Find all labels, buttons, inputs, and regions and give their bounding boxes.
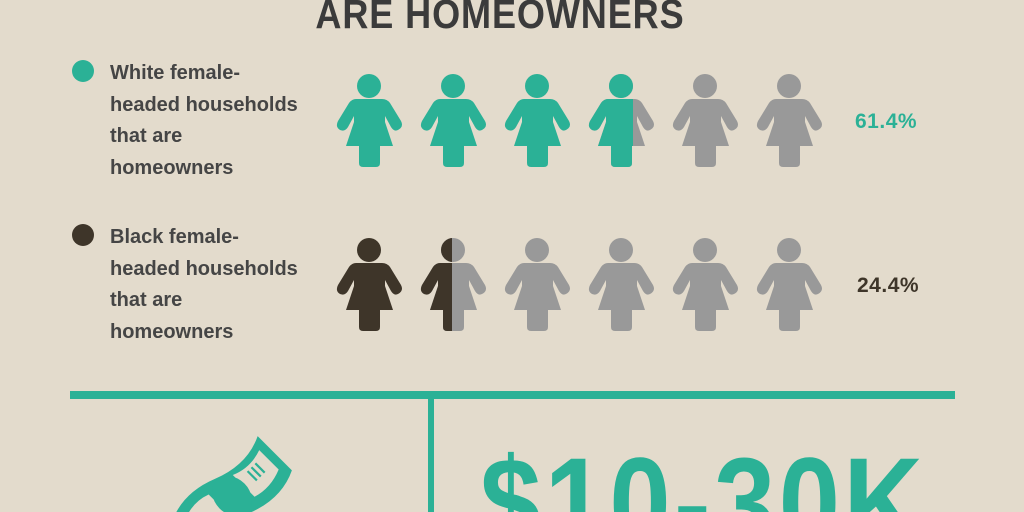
icon: money [167, 431, 297, 512]
legend: white households: homeowners [110, 156, 233, 178]
value: black: 24.4% [857, 274, 919, 297]
row: black figures [337, 238, 822, 331]
row: white figures [337, 74, 822, 167]
divider lines [70, 391, 955, 512]
legend: black households: homeowners [110, 320, 233, 342]
legend: black households: headed households [110, 258, 298, 280]
legend: black households [72, 224, 298, 342]
legend: white households: that are [110, 125, 182, 147]
legend: black households: Black female- [110, 226, 239, 248]
value: white: 61.4% [855, 110, 917, 133]
legend: white households [72, 60, 298, 178]
legend: black households: that are [110, 289, 182, 311]
legend: white households: White female- [110, 62, 240, 84]
legend: white households: headed households [110, 94, 298, 116]
